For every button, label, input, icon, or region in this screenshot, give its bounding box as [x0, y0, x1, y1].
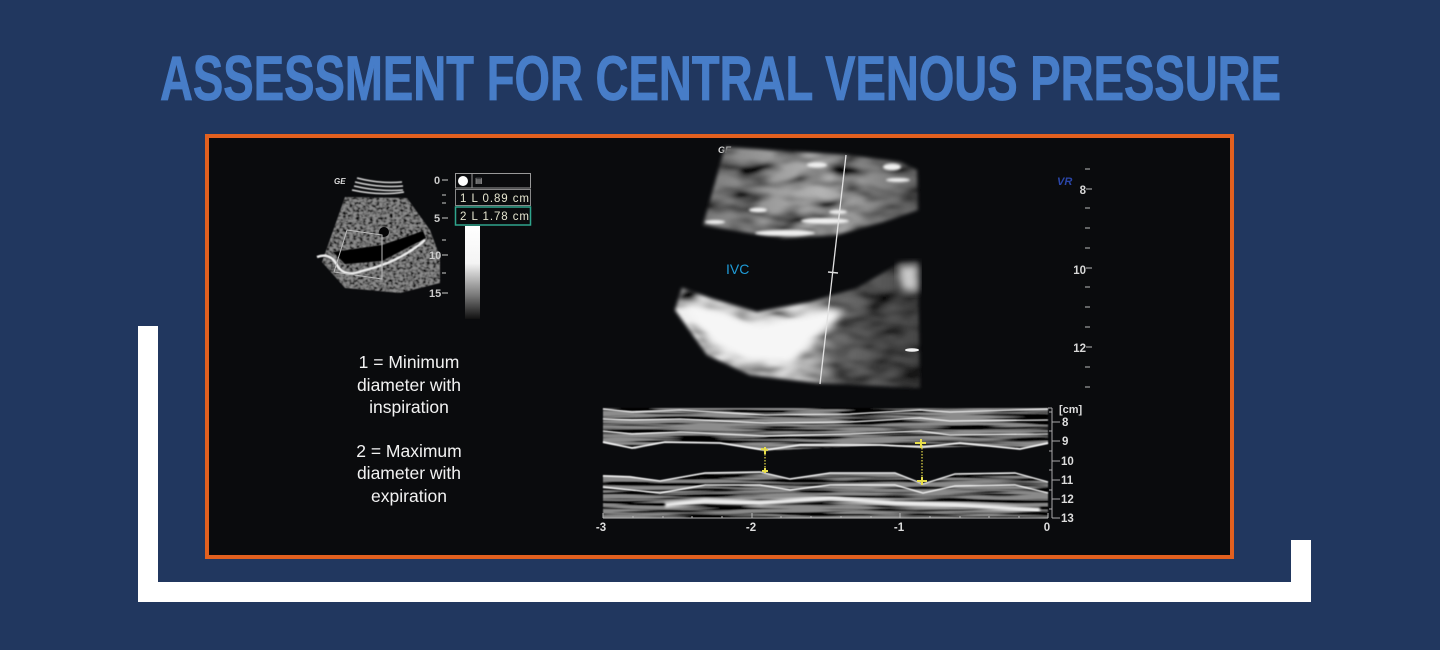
- right side bright patch: [898, 264, 918, 292]
- M-mode trace: 13: [1061, 513, 1074, 525]
- M-mode cursor line: [820, 155, 846, 384]
- lower wall band: [603, 472, 1048, 518]
- bright lower echo: [665, 498, 1040, 510]
- M-mode trace: 9: [1062, 436, 1068, 448]
- measurement table: 1 L 0.89 cm: [460, 193, 529, 205]
- IVC label: IVC: [726, 261, 749, 277]
- depth axis: [1048, 408, 1060, 518]
- upper tissue: [703, 147, 918, 238]
- VR initials: VR: [1057, 176, 1072, 188]
- transducer arcs: [352, 178, 404, 194]
- caption: measurement legend: diameter with: [357, 463, 461, 483]
- region of interest box: [334, 230, 382, 279]
- lower tissue highlight: [682, 304, 845, 365]
- measurement table: [456, 174, 530, 225]
- caption: measurement legend: 2 = Maximum: [356, 441, 462, 461]
- IVC long-axis ultrasound: [675, 145, 920, 388]
- GE logo small: GE: [334, 177, 346, 186]
- bright spots: [705, 162, 910, 236]
- M-mode trace: 8: [1062, 417, 1069, 429]
- liver fan sector: [322, 197, 440, 293]
- caption: measurement legend: diameter with: [357, 375, 461, 395]
- caption: measurement legend: inspiration: [369, 397, 449, 417]
- white corner bracket: [148, 326, 1301, 592]
- measurement table: ▤: [475, 176, 483, 185]
- M-mode trace: 10: [1061, 456, 1074, 468]
- upper wall band: [603, 408, 1048, 451]
- caption: measurement legend: expiration: [371, 486, 447, 506]
- depth scale right: [1057, 169, 1092, 387]
- measurement table: 2 L 1.78 cm: [460, 211, 529, 223]
- depth scale: 10: [429, 250, 441, 262]
- M-mode trace: -3: [596, 522, 606, 534]
- small liver ultrasound: [317, 174, 530, 319]
- M-mode trace: -1: [894, 522, 905, 534]
- panel: ultrasound images: [207, 136, 1232, 557]
- lower tissue: [675, 262, 920, 388]
- depth scale: 0: [434, 175, 440, 187]
- M-mode trace: 12: [1061, 494, 1074, 506]
- GE logo: GE: [718, 145, 732, 155]
- M-mode trace: 0: [1044, 522, 1050, 534]
- caption: measurement legend: [356, 352, 462, 506]
- M-mode trace: [cm]: [1059, 404, 1083, 416]
- greyscale bar: [465, 226, 480, 319]
- M-mode trace: -2: [746, 522, 756, 534]
- M-mode trace: [596, 404, 1083, 534]
- depth scale: [429, 175, 448, 300]
- depth scale: 15: [429, 288, 441, 300]
- depth scale right: 8: [1080, 185, 1087, 197]
- M-mode trace: 11: [1061, 475, 1074, 487]
- bright vessel wall: [317, 240, 425, 273]
- time axis: [603, 513, 1048, 518]
- depth scale right: 12: [1073, 343, 1086, 355]
- vein dark band: [333, 231, 426, 264]
- caption: measurement legend: 1 = Minimum: [359, 352, 459, 372]
- caliper markers: [761, 439, 927, 485]
- depth scale right: 10: [1073, 265, 1086, 277]
- depth scale: 5: [434, 213, 440, 225]
